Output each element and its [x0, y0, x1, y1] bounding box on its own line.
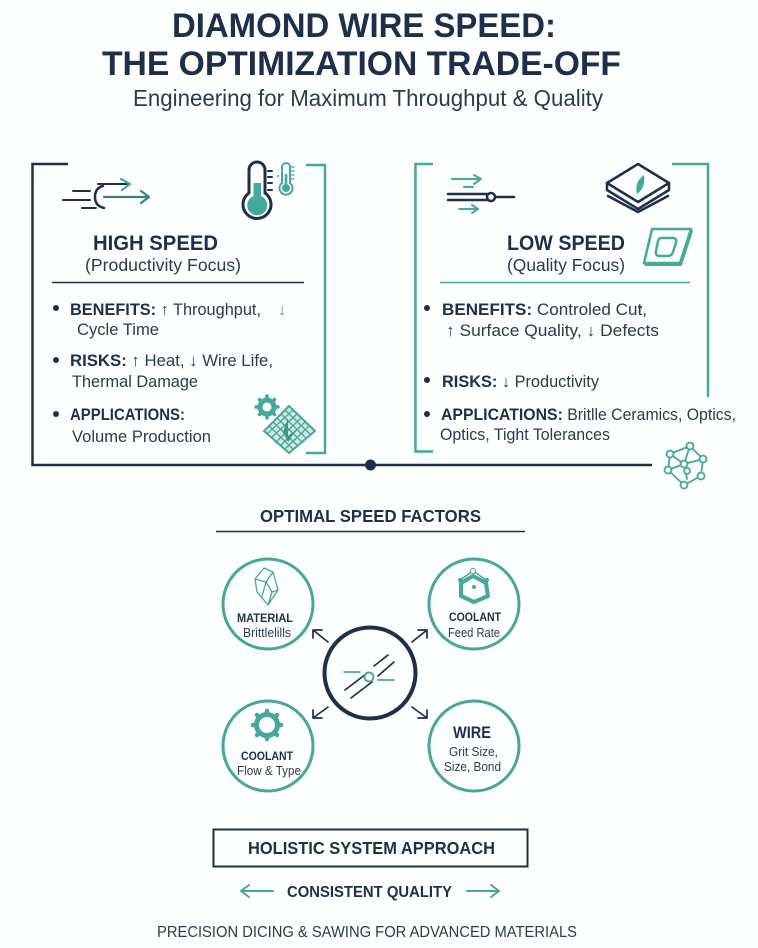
factor: coolant flow	[223, 701, 313, 791]
icon: large thermometer	[243, 162, 272, 218]
list: high speed: BENEFITS: ↑ Throughput,	[70, 301, 261, 319]
title: DIAMOND WIRE SPEED:	[172, 7, 556, 45]
diagram: speed factors	[223, 559, 519, 791]
icon: wafer stack	[607, 164, 669, 212]
list: low speed: ↑ Surface Quality, ↓ Defects	[446, 322, 659, 340]
icon: slow wire	[448, 175, 514, 213]
icon: polished chip	[644, 229, 692, 265]
factor: coolant feed rate	[429, 559, 519, 649]
list: low speed	[424, 301, 736, 444]
panel: high speed	[32, 162, 370, 465]
panel frame: low speed	[370, 164, 708, 465]
label: consistent quality: CONSISTENT QUALITY	[287, 884, 453, 901]
subtitle: Engineering for Maximum Throughput & Quality	[133, 85, 603, 111]
list: high speed: Thermal Damage	[72, 373, 198, 391]
hub circle	[324, 628, 416, 718]
center dot on divider	[365, 460, 376, 470]
list: low speed: BENEFITS: Controled Cut,	[442, 301, 647, 319]
list: low speed: RISKS: ↓ Productivity	[442, 373, 600, 391]
factor: wire: WIRE	[453, 723, 491, 742]
list: high speed: ↓	[278, 301, 286, 319]
box: holistic system approach	[214, 830, 528, 866]
list: low speed: APPLICATIONS: Britlle Ceramics, Optics,	[441, 406, 736, 424]
subheading: quality focus: (Quality Focus)	[507, 255, 625, 275]
factor: wire: Size, Bond	[444, 759, 501, 774]
icon: small thermometer	[277, 163, 294, 195]
factor: material: Brittlelills	[243, 626, 291, 640]
list: high speed	[53, 301, 286, 446]
heading: optimal speed factors: OPTIMAL SPEED FACTORS	[260, 506, 481, 526]
heading: low speed: LOW SPEED	[507, 232, 625, 255]
icon: molecule network	[664, 442, 706, 488]
consistent quality row	[241, 884, 499, 901]
arrow: right	[467, 885, 499, 897]
factor: coolant feed rate: COOLANT	[449, 612, 501, 624]
list: low speed: ↑	[636, 301, 644, 319]
list: high speed: Volume Production	[72, 428, 211, 446]
list: high speed: Cycle Time	[77, 321, 159, 339]
title: THE OPTIMIZATION TRADE-OFF	[102, 45, 621, 83]
list: high speed: RISKS: ↑ Heat, ↓ Wire Life,	[70, 352, 273, 370]
box: holistic system approach: HOLISTIC SYSTEM APPROACH	[248, 838, 495, 858]
arrows from hub	[313, 630, 427, 718]
factor: material	[223, 559, 313, 649]
heading: high speed: HIGH SPEED	[93, 232, 218, 255]
panel: low speed	[370, 164, 736, 488]
panel frame: high speed	[32, 164, 370, 465]
factor: wire: Grit Size,	[449, 744, 498, 759]
factor: coolant flow: COOLANT	[241, 751, 293, 763]
arrow: left	[241, 885, 273, 897]
footer: PRECISION DICING & SAWING FOR ADVANCED MATERIALS	[157, 924, 577, 941]
icon: gear and chip	[256, 396, 315, 453]
list: high speed: APPLICATIONS:	[70, 406, 185, 424]
factor: coolant feed rate: Feed Rate	[448, 626, 500, 640]
title	[102, 7, 621, 83]
factor: wire	[429, 701, 519, 791]
factor: coolant flow: Flow & Type	[237, 764, 301, 778]
list: low speed: Optics, Tight Tolerances	[440, 426, 610, 444]
factor: material: MATERIAL	[237, 613, 293, 625]
subheading: productivity focus: (Productivity Focus)	[85, 255, 241, 275]
icon: speed arrows	[63, 179, 149, 208]
